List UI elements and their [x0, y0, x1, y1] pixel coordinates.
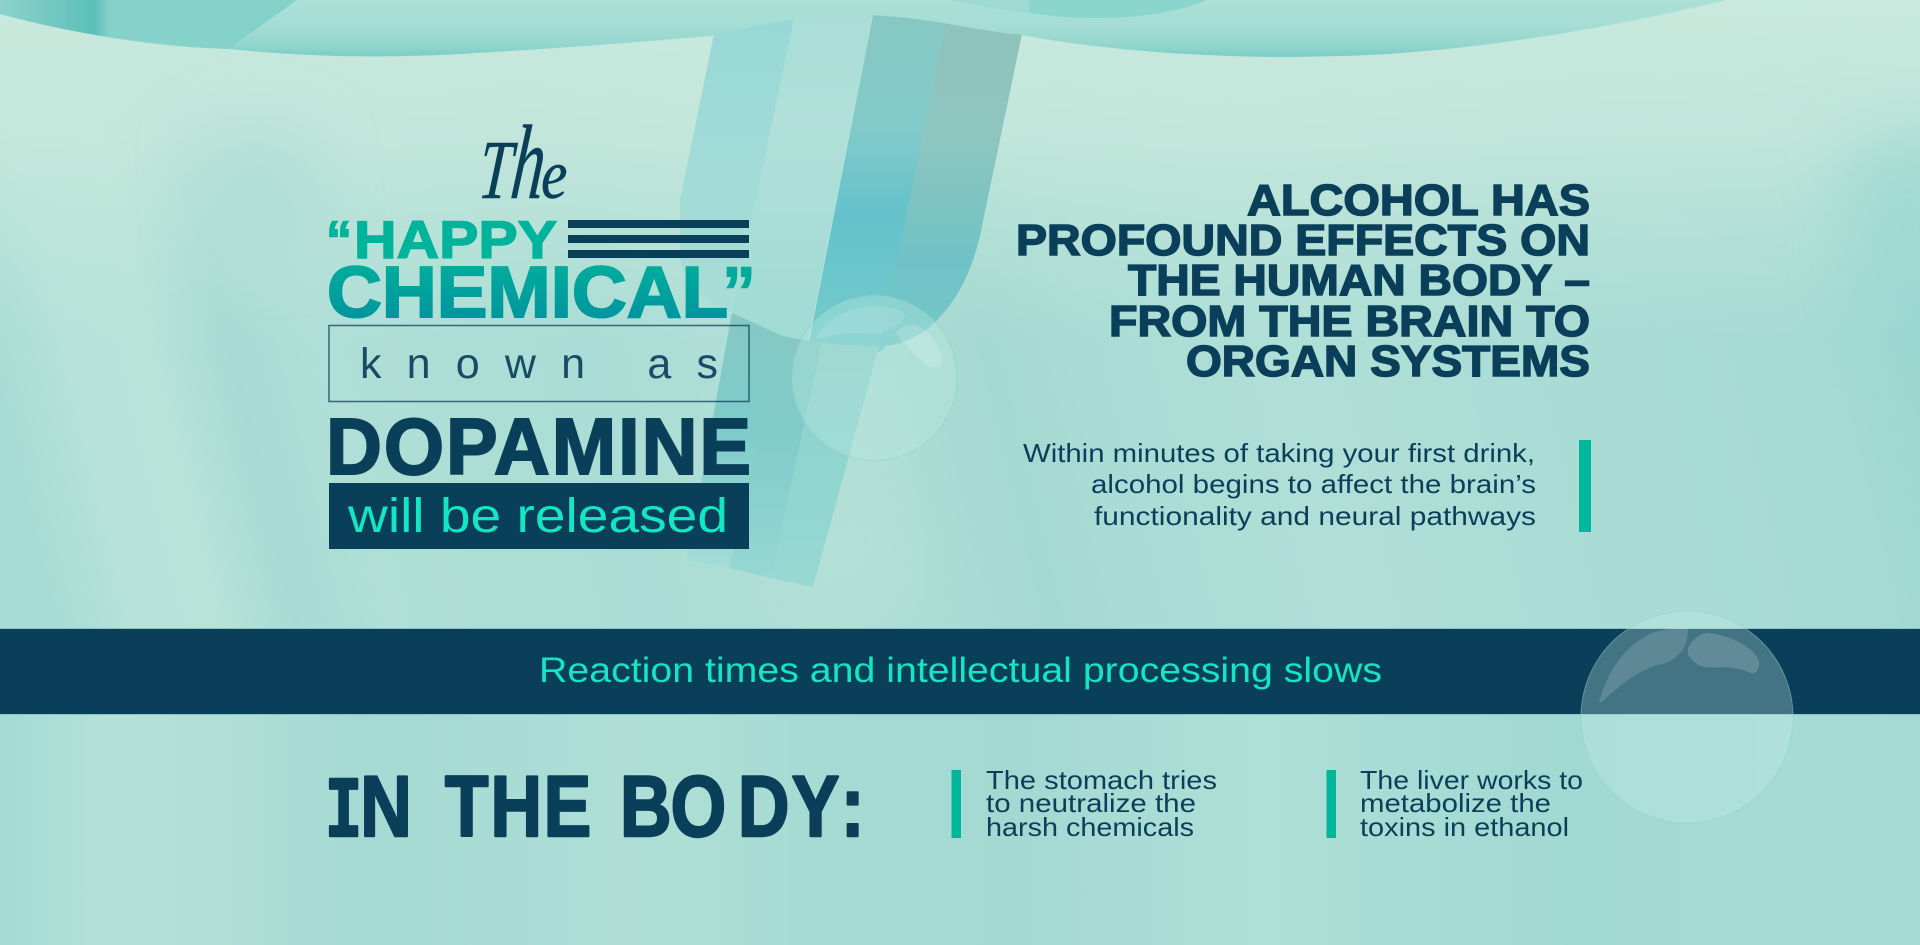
- text block: within minutes: functionality and neural pathways: [1094, 501, 1536, 531]
- small bubble: [792, 296, 957, 460]
- will be released banner: [329, 483, 749, 549]
- heading: alcohol effects: ORGAN SYSTEMS: [1186, 337, 1590, 386]
- text block: liver: metabolize the: [1360, 788, 1551, 818]
- accent bar: [1579, 440, 1591, 532]
- text block: liver: toxins in ethanol: [1360, 812, 1569, 842]
- heading: in the body: N THE BODY:: [360, 758, 865, 854]
- ribbon: lower fold: [687, 313, 879, 587]
- heading: alcohol effects: THE HUMAN BODY –: [1128, 256, 1590, 305]
- text block: within minutes: [1023, 438, 1536, 531]
- title: The: h: [506, 105, 552, 222]
- heading: in the body: I: [325, 765, 362, 862]
- title: The: T: [475, 123, 520, 216]
- heading: alcohol effects: ALCOHOL HAS: [1247, 176, 1590, 225]
- heading: alcohol effects: [1016, 176, 1590, 386]
- text block: stomach: harsh chemicals: [986, 812, 1194, 842]
- text block: liver: [1360, 765, 1583, 842]
- will be released banner: will be released: [347, 490, 728, 543]
- top wave: [0, 0, 1727, 57]
- title: CHEMICAL: ”: [722, 253, 756, 333]
- text block: stomach: The stomach tries: [986, 765, 1217, 795]
- decorative stripes: [568, 220, 749, 258]
- accent bar: liver: [1326, 770, 1336, 838]
- title: DOPAMINE: DOPAMINE: [326, 402, 753, 491]
- heading: alcohol effects: FROM THE BRAIN TO: [1109, 297, 1590, 346]
- text block: within minutes: alcohol begins to affect the brain’s: [1091, 469, 1536, 499]
- heading: alcohol effects: PROFOUND EFFECTS ON: [1016, 216, 1590, 265]
- title: CHEMICAL: CHEMICAL: [327, 253, 728, 333]
- band: reaction times: Reaction times and intellectual processing slows: [539, 651, 1382, 690]
- band: reaction times: [0, 628, 1920, 715]
- title: HAPPY: “: [326, 211, 352, 270]
- text block: within minutes: Within minutes of taking your first drink,: [1023, 438, 1535, 468]
- large bubble: [1581, 611, 1793, 823]
- text block: stomach: [986, 765, 1217, 842]
- title: The: [475, 105, 567, 222]
- text block: liver: The liver works to: [1360, 765, 1583, 795]
- title: HAPPY: HAPPY: [354, 211, 557, 270]
- accent bar: stomach: [952, 770, 961, 838]
- known as box: [329, 326, 749, 402]
- ribbon: upper fold: [680, 5, 1028, 352]
- title: The: e: [541, 137, 567, 214]
- text block: stomach: to neutralize the: [986, 788, 1196, 818]
- known as box: known as: [360, 340, 718, 388]
